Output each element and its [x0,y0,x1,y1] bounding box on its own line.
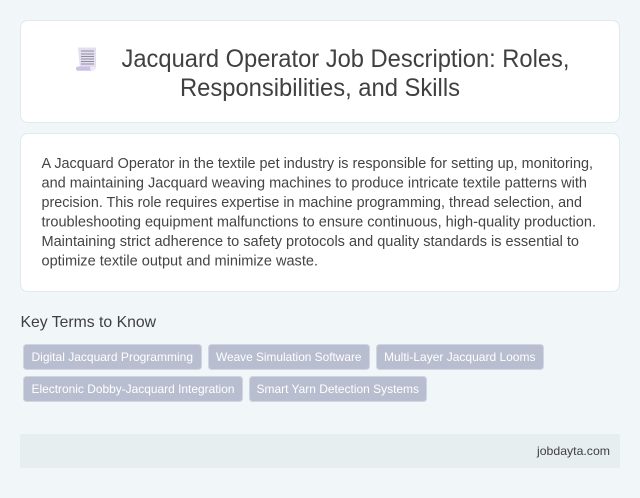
tag: weave simulation software: Weave Simulation Software [216,350,362,364]
tag: electronic dobby-jacquard integration [24,376,242,402]
title [122,45,570,102]
description text: A Jacquard Operator in the textile pet industry is responsible for setting up, monitoring, [42,156,593,172]
panel: description card [20,134,620,292]
footer [20,434,620,468]
title: Jacquard Operator Job Description: Roles, [122,45,570,73]
description text: and maintaining Jacquard weaving machines to produce intricate textile patterns with [42,176,587,192]
description text: troubleshooting equipment malfunctions to ensure continuous, high-quality production. [42,214,596,230]
description text: precision. This role requires expertise in machine programming, thread selection, and [42,195,582,211]
tag: weave simulation software [208,344,370,370]
description text: optimize textile output and minimize waste. [42,254,318,270]
tag: digital jacquard programming [24,344,202,370]
tag: smart yarn detection systems [250,376,426,402]
tag: smart yarn detection systems: Smart Yarn Detection Systems [256,382,419,396]
tag: electronic dobby-jacquard integration: Electronic Dobby-Jacquard Integration [32,382,234,396]
heading: key terms: Key Terms to Know [20,314,156,331]
title: Responsibilities, and Skills [180,74,460,102]
tag: digital jacquard programming: Digital Jacquard Programming [32,350,193,364]
description text [42,156,596,270]
tag: multi-layer jacquard looms [376,344,544,370]
footer: site name: jobdayta.com [536,444,610,458]
icon: paper scroll [76,48,96,71]
description text: Maintaining strict adherence to safety protocols and quality standards is essential to [42,234,579,250]
panel: header card [20,20,620,122]
tag: multi-layer jacquard looms: Multi-Layer Jacquard Looms [384,350,536,364]
tags: key terms [24,344,544,402]
